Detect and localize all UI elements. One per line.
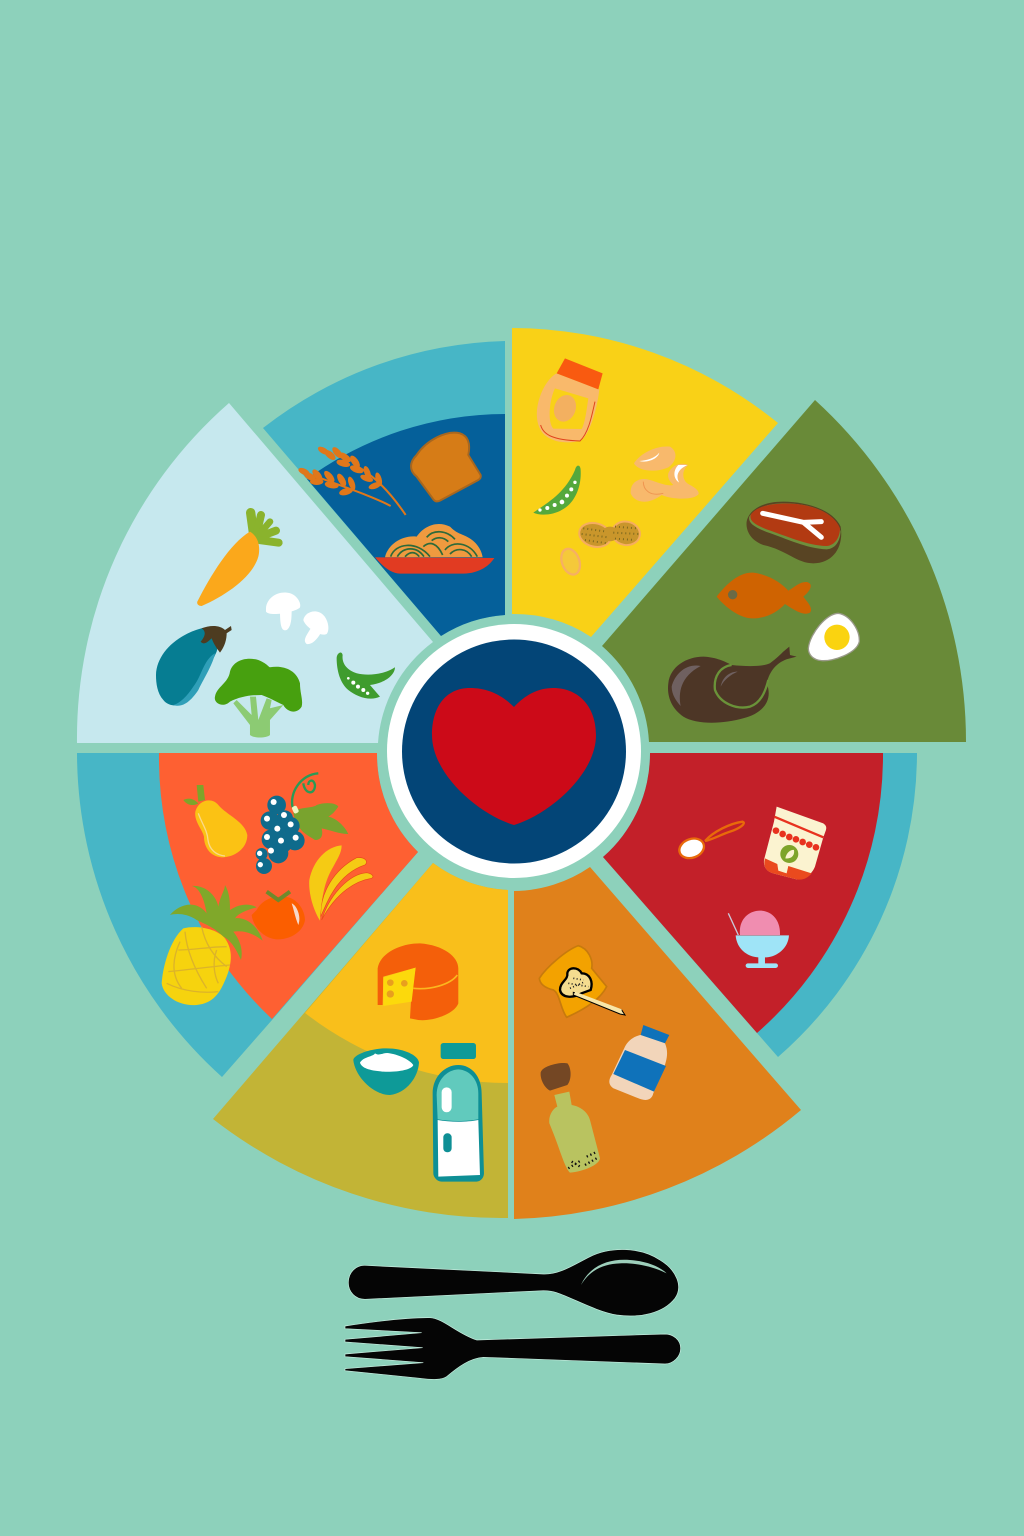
icon: spoon xyxy=(348,1250,679,1316)
icon: fork xyxy=(345,1318,681,1379)
icon: pineapple xyxy=(162,885,263,1005)
icon: egg xyxy=(808,613,859,661)
icon: bowl of yogurt xyxy=(353,1048,419,1095)
icon: wheat xyxy=(297,445,406,515)
icon: milk bottle xyxy=(433,1043,484,1182)
panel: legumes and nuts xyxy=(512,328,778,637)
icon: mushrooms xyxy=(266,593,328,644)
icon: bananas xyxy=(309,845,373,921)
icon: bread xyxy=(411,433,481,501)
panel: fruit xyxy=(77,753,418,1077)
icon: fish xyxy=(717,573,811,618)
panel: vegetables xyxy=(77,403,433,743)
panel: grains xyxy=(263,341,505,636)
icon: pea pod xyxy=(533,466,581,515)
icon: steak xyxy=(747,502,841,563)
icon: grapes xyxy=(256,773,348,874)
panel: dairy xyxy=(213,863,508,1218)
panel: sweets and dairy treats xyxy=(603,753,917,1057)
icon: bean xyxy=(558,546,583,577)
icon: mayonnaise bottle xyxy=(609,1025,669,1100)
icon: spoon of sugar xyxy=(677,822,744,861)
icon: pasta xyxy=(375,524,494,574)
panel: protein xyxy=(602,400,966,742)
icon: tomato xyxy=(252,892,305,939)
panel: fats and oils xyxy=(514,867,801,1219)
icon: oil bottle xyxy=(541,1063,600,1173)
icon: dessert cup xyxy=(764,807,826,880)
icon: cashews xyxy=(631,446,699,502)
icon: cheese xyxy=(378,943,458,1020)
icon: peanut butter jar xyxy=(537,358,603,442)
icon: peanut xyxy=(576,519,642,550)
icon: heart xyxy=(432,688,596,825)
icon: broccoli xyxy=(215,659,302,737)
icon: green beans xyxy=(337,653,395,699)
center badge xyxy=(387,624,641,878)
icon: roast chicken xyxy=(668,647,797,723)
icon: ice cream sundae xyxy=(728,911,789,968)
icon: pear xyxy=(183,785,247,857)
icon: carrot xyxy=(197,513,279,606)
icon: toast with spread and knife xyxy=(539,946,625,1017)
icon: eggplant xyxy=(156,626,232,706)
